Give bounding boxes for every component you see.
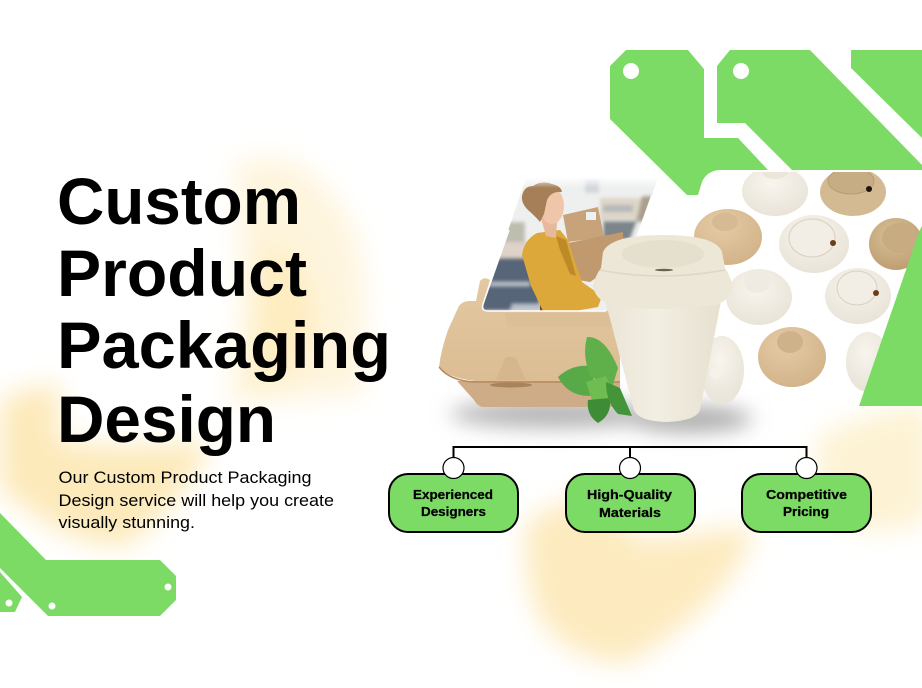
tag hole: long right [164,584,172,590]
woman: hair [522,182,562,222]
feature label: Designers [421,504,486,519]
mint leaf: bottom [588,398,610,423]
feature label: Pricing [783,504,829,519]
feature label: High-Quality [587,487,673,502]
right green panel [859,226,922,406]
cup lid rim [593,235,732,309]
feature box [742,474,871,532]
connector node [796,458,817,478]
lid: tan dome [694,209,762,265]
container lid [439,278,620,381]
description text: Our Custom Product Packaging [58,469,312,487]
title: Packaging [57,308,391,382]
cardboard box: lower [568,232,623,282]
tag hole: small [6,600,12,606]
feature box [566,474,695,532]
cup sip hole [655,269,673,271]
cup lid edge shade [600,270,725,276]
container base [457,381,620,407]
cup body [604,296,722,422]
woman: trousers [540,305,543,310]
lid: dark tan with rim [869,218,922,270]
coat shade [556,236,576,276]
bagasse food container [439,278,620,407]
tag hole: middle [733,63,749,79]
feature label: Materials [599,505,661,520]
mint sprig [558,337,632,423]
mint leaf: center [586,376,616,400]
lids photo panel [694,165,922,392]
woman: yellow coat [522,230,602,311]
mint leaf: top [585,337,618,388]
connector lines [454,447,806,468]
food box and cup shadow [450,400,752,432]
feature box [389,474,518,532]
woman: neck [541,217,557,238]
lid: white dome middle [726,269,792,325]
container lip [439,367,620,382]
tag: left [610,50,768,195]
lid: white with hole middle [825,268,891,324]
photo: woman carrying boxes [480,178,660,313]
lid: white clipped bottom right [846,332,882,392]
top right green price tags [610,50,922,195]
title: Design [57,382,276,456]
lid: white with sip hole [779,215,849,273]
description text: Design service will help you create [58,492,334,510]
lid: tan dome bottom [758,327,826,387]
tag: long [0,513,176,616]
coffee cup [593,235,732,422]
lid: tan with sip hole [820,168,886,216]
lid: white dome top [742,172,808,216]
background: soft yellow blobs [0,158,922,662]
connector node [620,458,640,478]
container tab [496,356,526,380]
tag: small [0,572,22,612]
feature: Competitive Pricing [742,458,871,532]
cup lid top [622,240,704,268]
photo backdrop: blurred street [480,178,660,313]
title: Product [57,236,307,310]
container raised panel [505,313,620,327]
shipping label [586,212,596,220]
title: Custom [57,164,301,238]
connector node [443,458,464,478]
cardboard box: upper [563,207,604,242]
photo white outline [483,195,652,311]
feature label: Experienced [413,487,493,502]
feature: Experienced Designers [389,458,518,532]
lid behind the cup [700,336,744,404]
feature label: Competitive [766,487,847,502]
mint leaf: left [558,366,598,396]
feature: High-Quality Materials [566,458,695,532]
description text: visually stunning. [58,514,195,532]
mint leaf: right [606,382,632,416]
tag: right [851,50,922,138]
photo top fade [520,176,660,188]
tag hole: left [623,63,639,79]
woman: face [542,192,564,224]
tag hole: long left [48,602,56,610]
bottom left green price tags [0,513,176,616]
tag: middle [717,50,922,170]
container handle [490,382,532,388]
